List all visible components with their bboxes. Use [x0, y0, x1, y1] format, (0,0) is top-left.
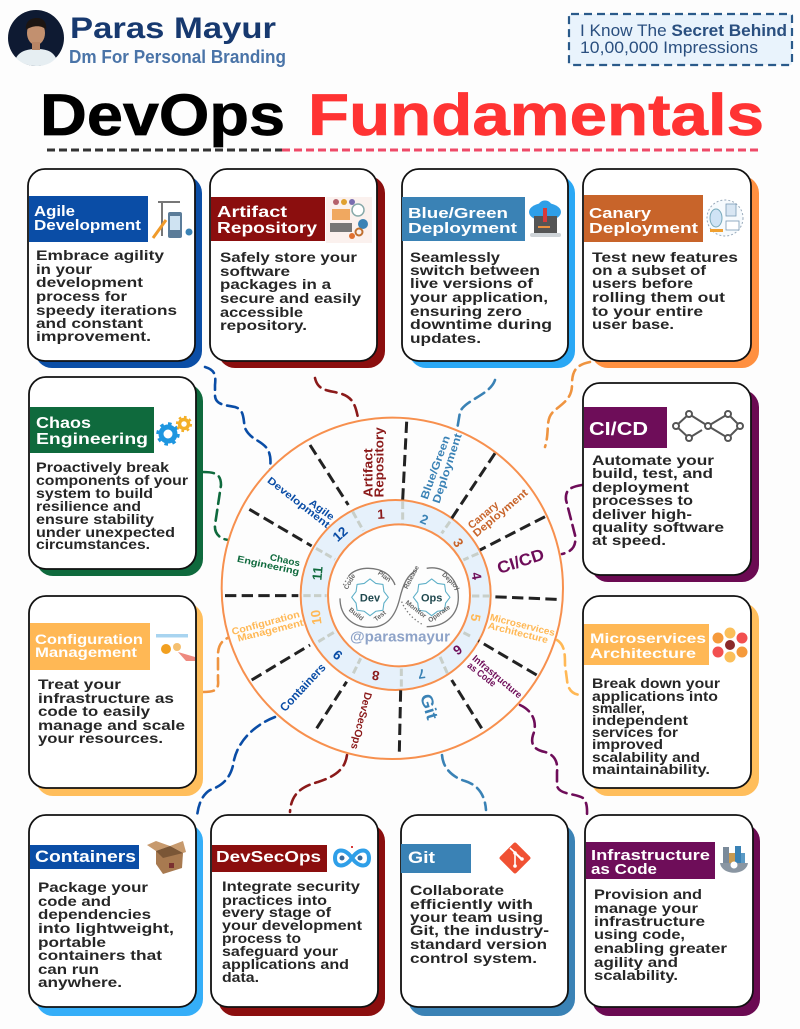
segment numbers — [308, 506, 485, 683]
text: configuration description: your resources. — [38, 731, 163, 746]
panel: devsecops — [211, 815, 385, 1016]
text: microservices description: scalability and — [592, 750, 700, 765]
text: devsecops description: data. — [222, 970, 259, 985]
text: canary description: users before — [592, 276, 693, 291]
text: devsecops description — [222, 879, 362, 985]
wheel labels: as Code — [465, 660, 498, 690]
icon: secure infinity — [335, 846, 369, 866]
panel: ci/cd — [583, 383, 759, 582]
text: configuration description: code to easily — [38, 704, 150, 719]
wheel labels: Deployment — [471, 487, 531, 540]
wheel labels: Deployment — [431, 432, 465, 505]
text: blue/green description: ensuring zero — [410, 304, 522, 319]
wheel labels: Blue/Green — [419, 434, 453, 501]
heading: agile development: Development — [34, 217, 141, 234]
segment numbers: 11 — [309, 565, 326, 581]
text: containers description: anywhere. — [38, 975, 122, 990]
text: infrastructure description: enabling greater — [594, 941, 728, 956]
text: containers description: code and — [38, 894, 111, 909]
panel: canary deployment — [583, 169, 759, 368]
heading: git — [401, 844, 471, 873]
panel: blue/green deployment — [402, 169, 575, 368]
text: ci/cd description: quality software — [592, 520, 724, 535]
text: chaos description: ensure stability — [36, 512, 154, 527]
heading: chaos engineering — [30, 407, 154, 453]
wheel labels: Canary — [466, 499, 501, 532]
text: blue/green description: updates. — [410, 331, 481, 346]
text: blue/green description — [410, 250, 552, 346]
heading: agile development: Agile — [34, 203, 75, 220]
icon: infinity nodes — [673, 411, 743, 441]
text: agile description: in your — [36, 262, 93, 277]
segment numbers: 1 — [377, 506, 386, 522]
panel: configuration management — [29, 596, 203, 796]
text: blue/green description: live versions of — [410, 276, 533, 291]
loop stage labels: Deploy — [440, 571, 461, 592]
heading: infrastructure as code: Infrastructure — [591, 848, 710, 864]
text: agile description: and constant — [36, 316, 143, 331]
segment numbers: 9 — [330, 647, 346, 663]
text: ci/cd description: deliver high- — [592, 507, 692, 522]
chart: central devops wheel — [222, 418, 563, 759]
text: ci/cd description: Automate your — [592, 453, 715, 468]
heading: devsecops: DevSecOps — [216, 849, 321, 866]
loop stage labels: Operate — [427, 604, 452, 624]
infinity loop lines — [340, 568, 458, 627]
loop stage labels — [343, 565, 461, 624]
heading: infrastructure as code — [586, 842, 715, 879]
panel: microservices architecture — [583, 596, 759, 796]
text: git description — [410, 883, 549, 966]
heading: containers — [30, 845, 139, 869]
text: chaos description: Proactively break — [36, 460, 169, 475]
wheel labels: Chaos — [269, 552, 301, 568]
heading: chaos engineering: Chaos — [36, 415, 91, 432]
icon: rocket and documents — [707, 200, 743, 236]
icon: service cluster — [712, 628, 748, 662]
heading: agile development — [29, 196, 148, 242]
text: microservices description: Break down your — [592, 676, 721, 691]
text: microservices description — [592, 676, 721, 777]
wheel labels: Agile — [307, 498, 336, 523]
loop stage labels: Build — [347, 607, 365, 622]
dev gear: Dev — [360, 592, 381, 604]
text: configuration description — [38, 677, 185, 746]
text: devsecops description: process to — [222, 931, 301, 946]
heading: infrastructure as code: as Code — [591, 862, 657, 878]
icon: git logo — [499, 842, 531, 874]
icon: crane and phone — [153, 202, 192, 238]
text: artifact description: accessible — [220, 305, 303, 320]
segment numbers: 7 — [417, 666, 426, 682]
heading: microservices architecture — [584, 624, 709, 665]
panel: git — [401, 815, 575, 1016]
text: git description: your team using — [410, 910, 543, 925]
header: author block — [8, 10, 286, 67]
text: artifact description — [220, 250, 361, 333]
wheel labels: Management — [236, 617, 306, 645]
text: infrastructure description: scalability. — [594, 968, 678, 983]
author tagline: Dm For Personal Branding — [69, 47, 286, 67]
segment numbers: 8 — [371, 668, 380, 683]
text: canary description — [592, 250, 738, 332]
text: blue/green description: downtime during — [410, 317, 552, 332]
heading: ci/cd: CI/CD — [589, 419, 648, 439]
title — [40, 83, 764, 150]
heading: chaos engineering: Engineering — [36, 431, 148, 448]
icon: author avatar — [8, 10, 64, 66]
text: chaos description — [36, 460, 189, 552]
text: agile description: Embrace agility — [36, 248, 164, 263]
heading: artifact repository: Artifact — [217, 204, 288, 221]
text: agile description: development — [36, 275, 143, 290]
icon: city on gear — [720, 846, 748, 873]
text: artifact description: repository. — [220, 318, 307, 333]
heading: devsecops — [212, 845, 327, 872]
text: ci/cd description: deployment — [592, 480, 689, 495]
icon: settings hand — [156, 634, 195, 661]
text: canary description: on a subset of — [592, 263, 706, 278]
text: configuration description: manage and scale — [38, 718, 185, 733]
wheel labels: DevSecOps — [348, 691, 374, 751]
wheel labels: Artifact — [362, 447, 376, 497]
text: ci/cd description: build, test, and — [592, 466, 713, 481]
text: canary description: Test new features — [592, 250, 738, 265]
title: DevOps — [40, 83, 285, 148]
text: canary description: rolling them out — [592, 290, 726, 305]
segment numbers: 12 — [330, 524, 351, 545]
heading: canary deployment — [584, 195, 703, 242]
wheel labels: Repository — [372, 427, 386, 497]
text: microservices description: independent — [592, 713, 688, 728]
text: infrastructure description: agility and — [594, 955, 678, 970]
text: artifact description: software — [220, 264, 290, 279]
loop stage labels: Monitor — [404, 599, 428, 620]
wheel labels: Infrastructure — [470, 653, 524, 701]
text: microservices description: smaller, — [592, 701, 645, 716]
text: canary description: to your entire — [592, 304, 703, 319]
text: devsecops description: Integrate security — [222, 879, 360, 894]
wheel labels: Development — [265, 475, 332, 531]
text: infrastructure description: manage your — [594, 901, 699, 916]
text: agile description: process for — [36, 289, 128, 304]
text: chaos description: system to build — [36, 486, 153, 501]
text: microservices description: services for — [592, 725, 679, 740]
wheel labels: CI/CD — [495, 545, 547, 578]
text: containers description — [38, 880, 174, 990]
text: containers description: can run — [38, 962, 99, 977]
heading: blue/green deployment: Blue/Green — [408, 205, 508, 222]
handle: @parasmayur: @parasmayur — [350, 630, 450, 646]
text: configuration description: infrastructure as — [38, 691, 174, 706]
text: microservices description: applications into — [592, 689, 718, 704]
wheel labels: Containers — [277, 660, 329, 714]
text: agile description: speedy iterations — [36, 303, 177, 318]
text: devsecops description: safeguard your — [222, 944, 339, 959]
text: artifact description: Safely store your — [220, 250, 358, 265]
text: chaos description: circumstances. — [36, 537, 150, 552]
wheel labels: Engineering — [236, 554, 301, 577]
segment numbers: 3 — [450, 536, 467, 550]
connectors between cards and wheel — [197, 362, 590, 817]
loop stage labels: Test — [373, 609, 388, 623]
text: devsecops description: your development — [222, 918, 362, 933]
panel: chaos engineering — [29, 377, 203, 576]
text: canary description: user base. — [592, 317, 674, 332]
text: infrastructure description — [594, 887, 728, 983]
callout: impressions badge — [569, 14, 792, 65]
icon: gears — [158, 417, 191, 444]
wheel labels — [231, 427, 556, 751]
wheel labels: Git — [416, 692, 442, 723]
author name: Paras Mayur — [70, 12, 276, 45]
icon: repository dashboard — [326, 197, 372, 243]
heading: canary deployment: Canary — [589, 205, 652, 222]
loop stage labels: Code — [343, 573, 358, 591]
loop stage labels: Plan — [376, 570, 392, 584]
text: chaos description: under unexpected — [36, 525, 175, 540]
text: infrastructure description: infrastructure — [594, 914, 705, 929]
text: git description: Git, the industry- — [410, 923, 549, 938]
heading: blue/green deployment — [402, 197, 525, 241]
text: containers description: containers that — [38, 948, 162, 963]
heading: blue/green deployment: Deployment — [408, 220, 517, 237]
icon: cloud laptop — [529, 200, 561, 237]
heading: git: Git — [408, 848, 435, 867]
text: containers description: dependencies — [38, 907, 151, 922]
heading: ci/cd — [584, 407, 667, 448]
heading: configuration management: Management — [35, 645, 138, 660]
heading: containers: Containers — [35, 847, 136, 866]
heading: configuration management: Configuration — [35, 632, 143, 647]
title: Fundamentals — [308, 83, 764, 148]
panel: agile development — [28, 169, 202, 368]
panel: containers — [29, 815, 203, 1016]
loop stage labels: Release — [403, 565, 421, 590]
text: blue/green description: switch between — [410, 263, 540, 278]
text: configuration description: Treat your — [38, 677, 122, 692]
callout: impressions badge: I Know The Secret Behind — [580, 21, 787, 40]
text: chaos description: resilience and — [36, 499, 141, 514]
text: ci/cd description: at speed. — [592, 533, 666, 548]
text: agile description — [36, 248, 177, 344]
text: blue/green description: your application, — [410, 290, 548, 305]
heading: microservices architecture: Architecture — [590, 645, 696, 661]
text: agile description: improvement. — [36, 329, 151, 344]
text: devsecops description: practices into — [222, 893, 327, 908]
heading: microservices architecture: Microservices — [590, 630, 706, 646]
wheel labels: Microservices — [489, 612, 556, 639]
segment numbers: 2 — [418, 511, 431, 528]
text: containers description: Package your — [38, 880, 149, 895]
text: git description: control system. — [410, 951, 537, 966]
text: devsecops description: applications and — [222, 957, 349, 972]
text: git description: standard version — [410, 937, 547, 952]
text: infrastructure description: Provision and — [594, 887, 702, 902]
text: artifact description: packages in a — [220, 277, 331, 292]
icon: cardboard box — [147, 841, 186, 874]
text: microservices description: maintainability. — [592, 762, 710, 777]
text: ci/cd description: processes to — [592, 493, 693, 508]
segment numbers: 4 — [468, 571, 485, 582]
callout: impressions badge: 10,00,000 Impressions — [580, 38, 758, 57]
heading: artifact repository — [211, 197, 325, 241]
wheel labels: Architecture — [487, 621, 550, 646]
segment numbers: 6 — [450, 642, 465, 658]
panel: artifact repository — [210, 169, 385, 368]
text: artifact description: secure and easily — [220, 291, 361, 306]
ops gear: Ops — [421, 592, 442, 604]
text: containers description: into lightweight, — [38, 921, 174, 936]
text: microservices description: improved — [592, 737, 663, 752]
text: git description: Collaborate — [410, 883, 504, 898]
text: devsecops description: every stage of — [222, 905, 331, 920]
panel: infrastructure as code — [585, 815, 760, 1016]
text: infrastructure description: using code, — [594, 927, 685, 942]
text: git description: efficiently with — [410, 897, 533, 912]
wheel labels: Configuration — [231, 609, 301, 638]
heading: canary deployment: Deployment — [589, 220, 698, 237]
heading: artifact repository: Repository — [217, 220, 317, 237]
text: blue/green description: Seamlessly — [410, 250, 500, 265]
segment numbers: 10 — [308, 609, 325, 626]
text: ci/cd description — [592, 453, 724, 548]
text: containers description: portable — [38, 935, 106, 950]
icon: dev ops infinity loop — [340, 565, 461, 627]
heading: configuration management — [30, 623, 150, 670]
text: chaos description: components of your — [36, 473, 189, 488]
segment numbers: 5 — [467, 613, 484, 623]
